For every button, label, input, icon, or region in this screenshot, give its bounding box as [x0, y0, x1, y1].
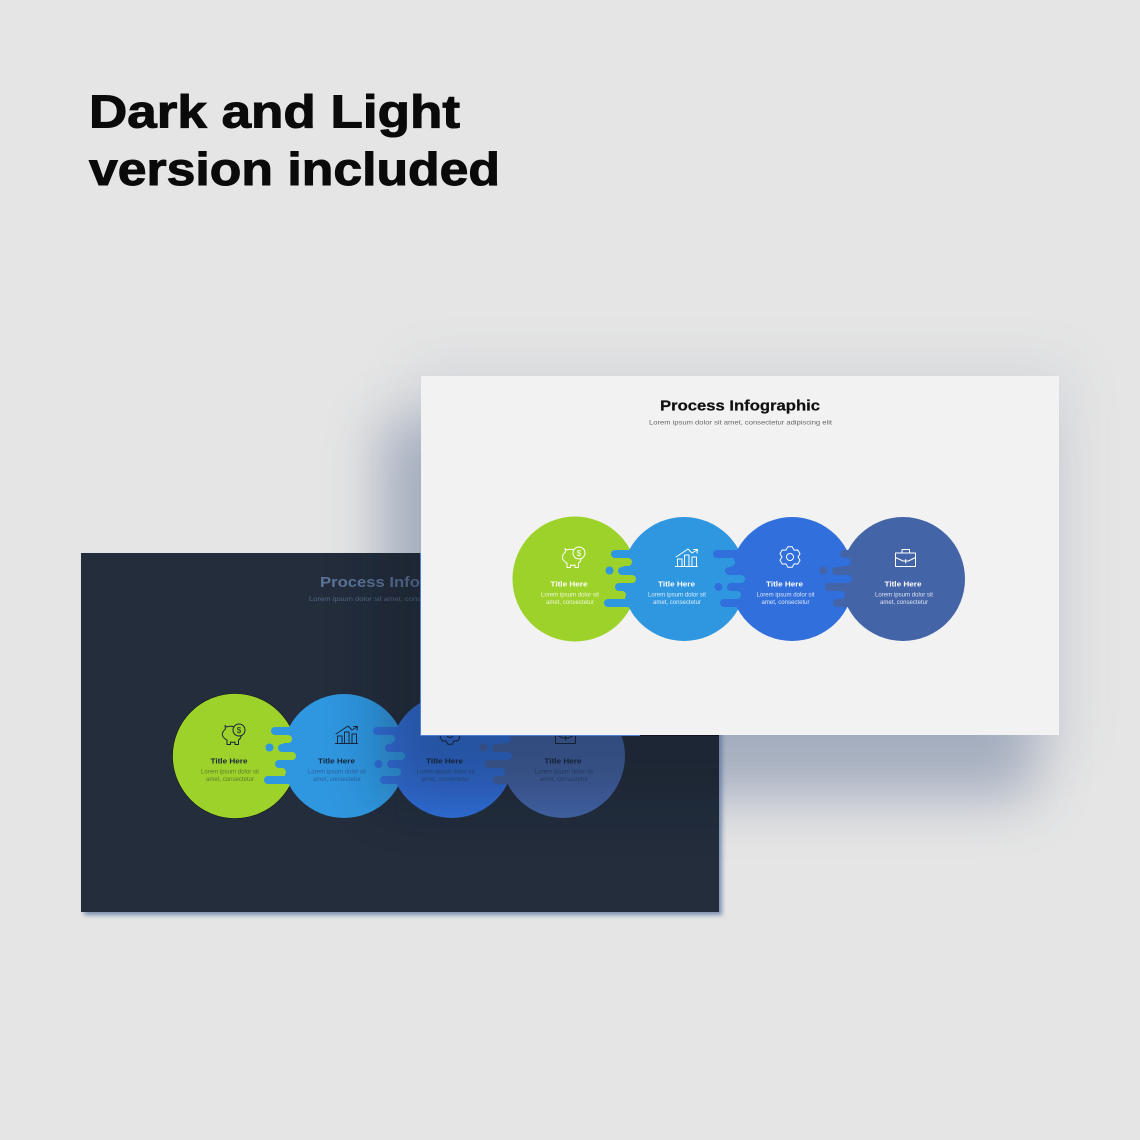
dark step 3 text: Title Here	[426, 756, 463, 766]
dark step 2 text: Lorem ipsum dolor sit	[308, 769, 366, 775]
dark step 3 text: amet, consectetur	[422, 777, 470, 783]
headline: Dark and Light	[89, 86, 460, 138]
icon: gear	[440, 724, 460, 744]
step 4 text: Title Here	[884, 580, 922, 588]
dark circle 4	[501, 694, 625, 818]
dark slide title: Process Infographic	[320, 574, 480, 591]
dark circle 3	[390, 694, 514, 818]
dark connector 2 to 3	[365, 727, 417, 784]
connector 2 to 3	[705, 550, 757, 607]
dark step 1 text: Title Here	[210, 756, 248, 766]
dark connector 3 to 4	[480, 727, 530, 784]
step 1 text: amet, consectetur	[546, 600, 594, 606]
circle 2	[622, 517, 746, 641]
icon: briefcase	[556, 726, 576, 744]
dark step 4 text: Title Here	[544, 756, 582, 766]
faint ambient shadow of light slide	[405, 360, 1075, 760]
connector 1 to 2	[600, 550, 651, 607]
connector 3 to 4	[820, 550, 870, 607]
step 2 text: Lorem ipsum dolor sit	[648, 592, 706, 598]
light process chain	[512, 516, 965, 642]
dark step 1 text: Lorem ipsum dolor sit	[201, 769, 259, 775]
step 3 text: Lorem ipsum dolor sit	[756, 592, 815, 598]
step 3 text: amet, consectetur	[762, 600, 810, 606]
light slide subtitle: Lorem ipsum dolor sit amet, consectetur adipiscing elit	[649, 420, 832, 426]
headline: version included	[89, 143, 500, 195]
panel: light slide	[421, 376, 1059, 735]
dark step 2 text	[308, 756, 366, 783]
icon: piggy bank	[562, 547, 585, 568]
circle 4	[841, 517, 965, 641]
icon: bar chart	[336, 726, 358, 744]
step 4 text: Lorem ipsum dolor sit	[875, 592, 933, 598]
step 2 text	[648, 580, 706, 606]
dark step 2 text: Title Here	[318, 756, 355, 766]
dark step 3 text: Lorem ipsum dolor sit	[416, 769, 475, 775]
circle 1	[512, 516, 638, 642]
circle 3	[730, 517, 854, 641]
icon: piggy bank	[222, 724, 245, 744]
dark connector 1 to 2	[260, 727, 311, 784]
panel: dark slide	[81, 553, 719, 912]
step 3 text	[756, 580, 815, 606]
light slide title: Process Infographic	[660, 398, 820, 414]
step 4 text	[875, 580, 933, 606]
shadow of light slide falling on dark slide	[352, 576, 625, 818]
shadow of dark slide	[84, 557, 722, 915]
icon: briefcase	[896, 550, 916, 566]
dark step 2 text: amet, consectetur	[313, 777, 361, 783]
step 1 text: Title Here	[550, 580, 588, 588]
icon: bar chart	[676, 549, 698, 566]
step 2 text: Title Here	[658, 580, 695, 588]
dark step 4 text: amet, consectetur	[540, 777, 588, 783]
step 2 text: amet, consectetur	[653, 600, 701, 606]
dark step 3 text	[416, 756, 475, 783]
dark circle 2	[282, 694, 406, 818]
dark step 1 text: amet, consectetur	[206, 777, 254, 783]
dark step 4 text	[535, 756, 593, 783]
icon: piggy bank: $	[237, 726, 242, 735]
dark step 4 text: Lorem ipsum dolor sit	[535, 769, 593, 775]
step 1 text	[541, 580, 599, 606]
soft shadow of light slide on background	[380, 420, 1035, 800]
step 3 text: Title Here	[766, 580, 803, 588]
dark process chain	[172, 694, 625, 818]
dark slide subtitle: Lorem ipsum dolor sit amet, consectetur adipiscing elit	[309, 596, 492, 603]
dark step 1 text	[201, 756, 259, 783]
icon: piggy bank: $	[577, 549, 582, 558]
headline	[89, 86, 500, 195]
icon: gear	[780, 547, 800, 567]
step 4 text: amet, consectetur	[880, 600, 928, 606]
step 1 text: Lorem ipsum dolor sit	[541, 592, 599, 598]
dark circle 1	[172, 694, 298, 818]
